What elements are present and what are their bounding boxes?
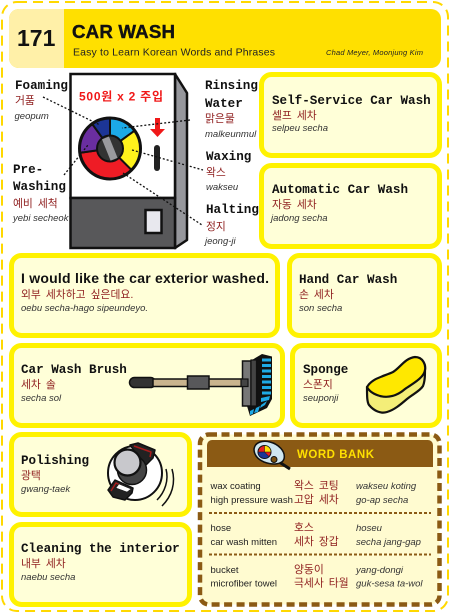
word list group 2 <box>210 521 421 548</box>
word list group 1: high pressure wash <box>210 495 293 506</box>
word list group 1: 왁스 코팅 <box>294 479 339 492</box>
panel: hand car wash: son secha <box>299 303 342 314</box>
panel: polishing: 광택 <box>21 469 41 482</box>
label: rinsing water: Rinsing <box>205 79 258 93</box>
panel: car wash brush: secha sol <box>21 393 62 404</box>
panel: sponge: Sponge <box>303 363 348 377</box>
icon: painter's palette fan <box>254 441 290 469</box>
header banner <box>9 9 441 68</box>
car wash machine illustration <box>70 74 187 248</box>
word list group 3: microfiber towel <box>210 578 277 590</box>
panel: phrase: 외부 세차하고 싶은데요. <box>21 287 133 301</box>
panel: sponge: 스폰지 <box>303 378 333 391</box>
label: pre-washing: 예비 세척 <box>13 197 58 210</box>
label: halting: jeong-ji <box>203 236 237 247</box>
label: foaming: geopum <box>14 111 49 122</box>
word list group 3 <box>210 563 423 590</box>
word list group 3: 양동이 <box>294 563 324 576</box>
panel: hand car wash: 손 세차 <box>299 288 334 301</box>
panel: cleaning the interior: naebu secha <box>21 572 75 583</box>
panel: phrase: oebu secha-hago sipeundeyo. <box>21 303 148 314</box>
panel: car wash brush <box>12 346 282 426</box>
label: rinsing water <box>205 79 258 140</box>
panel: polishing: gwang-taek <box>21 484 71 495</box>
panel: hand car wash: Hand Car Wash <box>299 273 397 287</box>
label: pre-washing: Washing <box>13 180 66 194</box>
label: waxing <box>206 150 251 193</box>
word list group 3: 극세사 타월 <box>294 576 349 590</box>
panel: cleaning the interior: 내부 세차 <box>21 557 66 570</box>
word list group 2: car wash mitten <box>210 537 277 548</box>
panel: word bank <box>200 434 440 604</box>
word list group 3: guk-sesa ta-wol <box>356 578 423 590</box>
panel: automatic car wash: Automatic Car Wash <box>272 183 408 197</box>
icon: sponge <box>367 357 425 413</box>
word list group 2: hose <box>210 523 231 534</box>
word list group 2: 세차 장갑 <box>294 535 339 548</box>
word list group 2: secha jang-gap <box>356 537 421 548</box>
coin return door <box>146 210 162 233</box>
icon: brush <box>130 354 272 416</box>
authors: Chad Meyer, Moonjung Kim <box>326 48 423 57</box>
word list group 1: wakseu koting <box>356 481 417 492</box>
label: pre-washing: yebi secheok <box>12 213 70 224</box>
panel: polishing: Polishing <box>21 454 89 468</box>
label: foaming <box>14 79 68 122</box>
word list group 1: go-ap secha <box>356 495 408 506</box>
panel: phrase: I would like the car exterior washed. <box>21 270 269 286</box>
panel: automatic car wash: jadong secha <box>269 213 328 224</box>
panel: automatic car wash <box>262 166 440 246</box>
word list group 1: 고압 세차 <box>294 493 339 506</box>
panel: car wash brush: 세차 솔 <box>21 378 56 391</box>
label: halting: Halting <box>206 203 259 217</box>
label: waxing: 왁스 <box>206 166 226 179</box>
word bank heading: WORD BANK <box>297 449 375 461</box>
panel: phrase <box>12 256 278 336</box>
coin instruction: 500원 x 2 주입 <box>79 90 163 104</box>
panel: automatic car wash: 자동 세차 <box>272 198 317 211</box>
word list group 1 <box>210 479 417 506</box>
label: waxing: Waxing <box>206 150 251 164</box>
label: halting <box>203 203 259 247</box>
label: foaming: Foaming <box>15 79 68 93</box>
label: rinsing water: Water <box>205 97 243 111</box>
panel: self-service car wash: Self-Service Car Wash <box>272 94 431 108</box>
label: rinsing water: 맑은물 <box>205 112 235 125</box>
word list group 2: hoseu <box>356 523 383 534</box>
panel: self-service car wash <box>262 74 440 156</box>
label: halting: 정지 <box>206 220 226 233</box>
word bank header bar <box>207 440 433 467</box>
label: foaming: 거품 <box>15 94 35 107</box>
word list group 3: yang-dongi <box>355 565 404 576</box>
icon: polisher <box>108 443 174 506</box>
panel: hand car wash <box>290 256 440 336</box>
red down arrow <box>150 118 165 137</box>
subtitle: Easy to Learn Korean Words and Phrases <box>73 46 275 58</box>
dotted leader lines <box>43 97 203 225</box>
label: waxing: wakseu <box>206 182 239 193</box>
label: pre-washing: Pre- <box>13 163 43 177</box>
word list group 3: bucket <box>210 565 239 576</box>
word list group 1: wax coating <box>210 481 261 492</box>
panel: car wash brush: Car Wash Brush <box>21 363 127 377</box>
title: CAR WASH <box>72 21 175 42</box>
panel: self-service car wash: selpeu secha <box>272 123 328 134</box>
panel: sponge <box>292 346 440 426</box>
word list group 2: 호스 <box>294 521 314 534</box>
panel: cleaning the interior: Cleaning the interior <box>21 542 180 556</box>
coin slot <box>154 145 160 171</box>
panel: polishing <box>12 434 190 514</box>
lesson number: 171 <box>17 25 56 51</box>
panel: sponge: seuponji <box>303 393 339 404</box>
panel: cleaning the interior <box>12 524 190 604</box>
label: rinsing water: malkeunmul <box>205 129 257 140</box>
panel: self-service car wash: 셀프 세차 <box>272 109 317 122</box>
label: pre-washing <box>12 163 70 224</box>
dial <box>79 118 141 180</box>
